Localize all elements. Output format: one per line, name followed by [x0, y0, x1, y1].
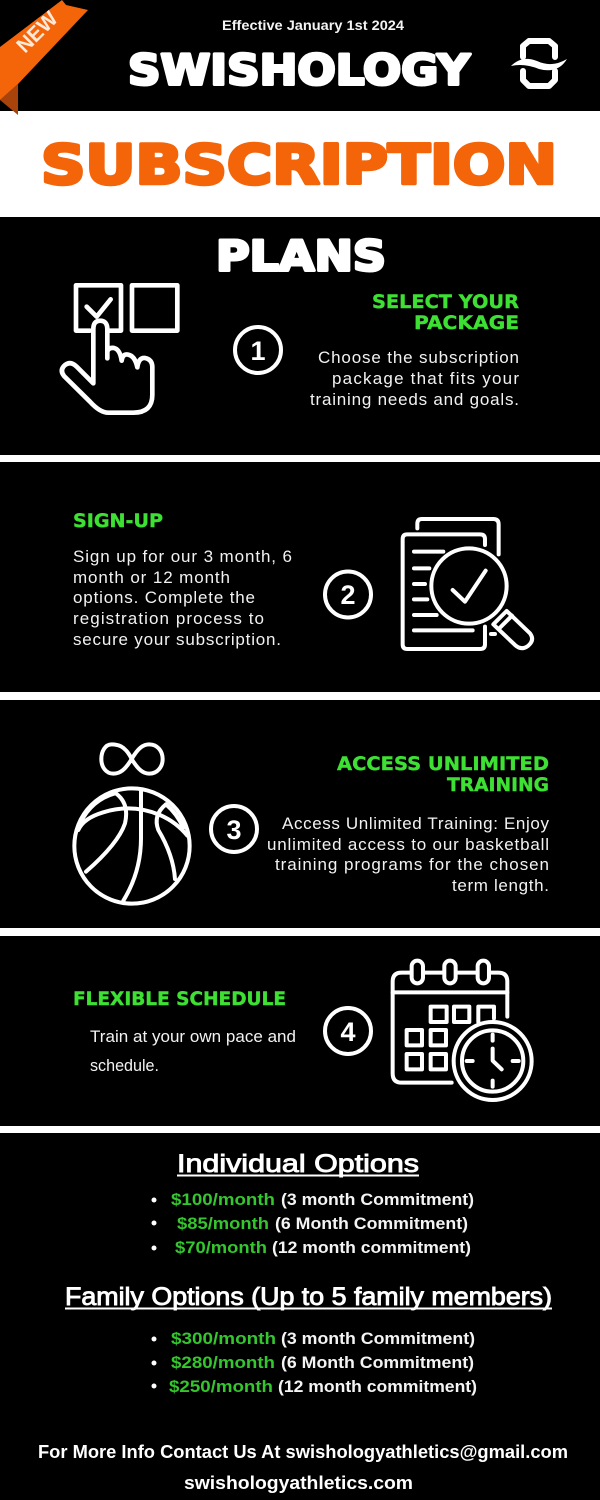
- text: step 2 body: registration process to: [73, 609, 264, 628]
- text: step 1 body: training needs and goals.: [310, 390, 519, 409]
- price list: individual: (12 month commitment): [272, 1238, 471, 1257]
- price list: individual: $100/month: [171, 1190, 275, 1209]
- price list: family: $300/month: [171, 1329, 276, 1348]
- text: step 3 body: unlimited access to our basketball: [267, 835, 549, 854]
- price list: family: [152, 1329, 477, 1396]
- price list: individual: $85/month: [177, 1214, 269, 1233]
- step number 4: 4: [340, 1017, 356, 1047]
- panel: subscription white band: [0, 111, 600, 217]
- heading: access unlimited training: [337, 753, 549, 796]
- step number 3: [211, 806, 257, 852]
- text: step 2 body: month or 12 month: [73, 568, 230, 587]
- icon: infinity and basketball: [74, 744, 190, 904]
- text: step 4 body: schedule.: [90, 1056, 159, 1075]
- title: subscription: SUBSCRIPTION: [41, 134, 557, 196]
- text: step 1 body: package that fits your: [332, 369, 519, 388]
- price list: family: (6 Month Commitment): [281, 1353, 474, 1372]
- footer: contact: For More Info Contact Us At swishologyathletics@gmail.com: [38, 1442, 568, 1462]
- step number 2: 2: [340, 580, 356, 610]
- step number 3: 3: [226, 815, 242, 845]
- text: step 2 body: Sign up for our 3 month, 6: [73, 547, 292, 566]
- ribbon: new: [0, 0, 88, 115]
- heading: select your package: PACKAGE: [414, 312, 519, 334]
- ribbon: new: NEW: [12, 7, 63, 58]
- heading: family options: Family Options (Up to 5 family members): [65, 1283, 552, 1311]
- panel: individual options: [152, 1150, 474, 1257]
- panel: step 1: [62, 285, 519, 413]
- brand name: SWISHOLOGY: [128, 46, 471, 94]
- heading: access unlimited training: ACCESS UNLIMITED: [337, 753, 549, 775]
- heading: individual options: Individual Options: [177, 1150, 419, 1178]
- effective date: Effective January 1st 2024: [222, 17, 404, 33]
- footer: contact: swishologyathletics.com: [184, 1473, 413, 1493]
- divider bands: [0, 455, 600, 1133]
- price list: individual: (3 month Commitment): [281, 1190, 474, 1209]
- heading: select your package: SELECT YOUR: [372, 291, 519, 313]
- step number 4: [325, 1008, 371, 1054]
- step number 2: [325, 572, 371, 618]
- heading: flexible schedule: FLEXIBLE SCHEDULE: [73, 988, 286, 1010]
- text: step 2 body: options. Complete the: [73, 588, 255, 607]
- text: step 1 body: Choose the subscription: [318, 348, 519, 367]
- panel: family options: [65, 1283, 552, 1396]
- price list: individual: (6 Month Commitment): [275, 1214, 468, 1233]
- text: step 3 body: term length.: [452, 876, 549, 895]
- footer: contact: [38, 1442, 568, 1493]
- text: step 2 body: [73, 547, 292, 649]
- step number 1: [235, 327, 281, 373]
- icon: hand selecting checkbox: [62, 285, 177, 413]
- price list: family: $250/month: [169, 1377, 273, 1396]
- text: step 3 body: training programs for the chosen: [275, 855, 549, 874]
- step number 1: 1: [250, 336, 266, 366]
- icon: logo: [511, 41, 567, 86]
- text: step 3 body: Access Unlimited Training: Enjoy: [282, 814, 550, 833]
- price list: individual: $70/month: [175, 1238, 267, 1257]
- text: step 4 body: Train at your own pace and: [90, 1027, 296, 1046]
- text: step 2 body: secure your subscription.: [73, 630, 281, 649]
- text: step 1 body: [310, 348, 519, 409]
- panel: step 2: [73, 510, 532, 649]
- heading: sign-up: SIGN-UP: [73, 510, 163, 532]
- price list: family: (12 month commitment): [278, 1377, 477, 1396]
- heading: plans: PLANS: [216, 232, 386, 280]
- panel: step 3: [74, 744, 549, 904]
- price list: family: $280/month: [171, 1353, 275, 1372]
- heading: select your package: [372, 291, 519, 334]
- price list: individual: [152, 1190, 474, 1257]
- text: step 3 body: [267, 814, 550, 895]
- icon: documents with magnifier: [403, 519, 532, 649]
- price list: family: (3 month Commitment): [281, 1329, 475, 1348]
- text: step 4 body: [90, 1027, 296, 1075]
- heading: access unlimited training: TRAINING: [447, 774, 549, 796]
- icon: calendar with clock: [393, 961, 532, 1100]
- panel: step 4: [73, 961, 532, 1100]
